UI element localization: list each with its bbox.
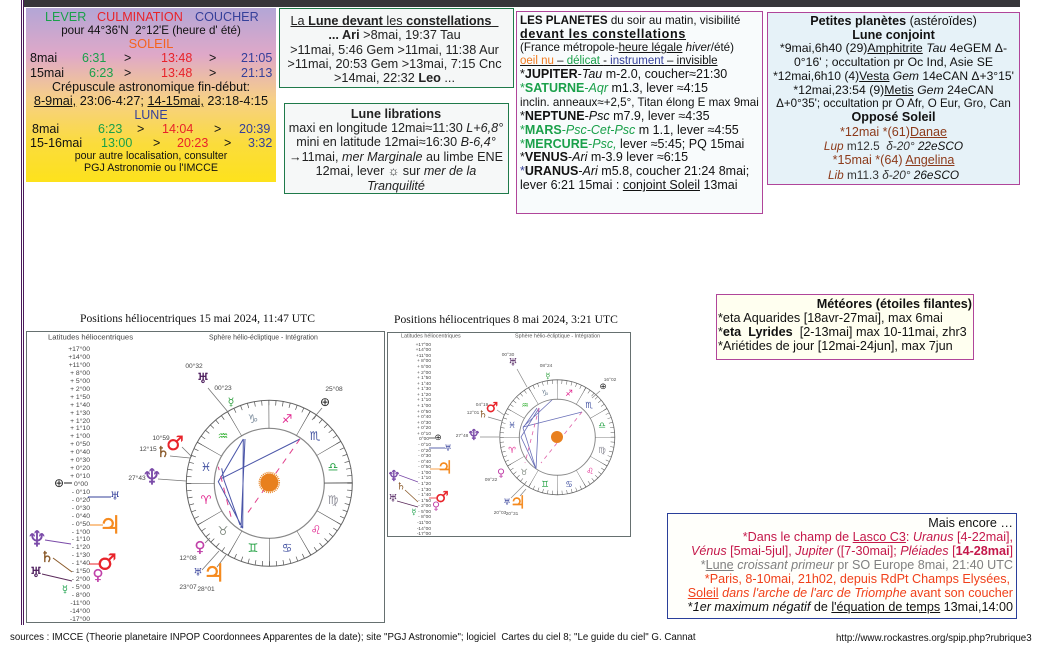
planet degree labels: 12°01 bbox=[467, 410, 480, 416]
heading: Petites planètes (astéroïdes) bbox=[810, 14, 977, 28]
planets around wheel bbox=[142, 371, 330, 588]
planets around wheel: ♃ bbox=[510, 492, 526, 514]
panel: lunar librations: 12mai, lever ☼ sur mer de la bbox=[316, 164, 476, 178]
latitude planets: ♅ bbox=[389, 494, 397, 504]
latitude scale: + 0°40 bbox=[70, 448, 90, 456]
latitude scale: - 1°30 bbox=[418, 487, 431, 493]
Saturn details: inclin. anneaux≈+2,5°, Titan élong E max 9mai bbox=[520, 96, 759, 109]
latitude scale: + 1°20 bbox=[70, 417, 90, 425]
zodiac signs: ♎︎ bbox=[328, 460, 338, 474]
zodiac signs: ♍︎ bbox=[328, 493, 339, 507]
panel: lunar librations: →11mai, mer Marginale au limbe ENE bbox=[289, 150, 503, 164]
latitude scale: + 0°20 bbox=[417, 425, 431, 431]
latitude scale: +11°00 bbox=[416, 353, 431, 359]
latitude scale: - 1°50 bbox=[418, 498, 431, 504]
Amphitrite: *9mai,6h40 (29)Amphitrite Tau 4eGEM Δ- bbox=[780, 41, 1007, 55]
planet degree labels: 00°23 bbox=[214, 384, 232, 392]
latitude scale: +11°00 bbox=[69, 361, 90, 369]
subheading: opposition: Opposé Soleil bbox=[852, 110, 935, 124]
panel: other events: Soleil dans l'arche de l'arc de Triomphe avant son coucher bbox=[688, 586, 1013, 600]
latitude scale: - 0°10 bbox=[418, 442, 431, 448]
eta Lyrides: *eta Lyrides [2-13mai] max 10-11mai, zhr3 bbox=[718, 325, 967, 339]
sun row 15 mai: 15mai bbox=[30, 66, 64, 80]
location line: pour 44°36'N 2°12'E (heure d' été) bbox=[61, 24, 241, 37]
planets around wheel: ♀ bbox=[194, 538, 206, 556]
latitude scale: -14°00 bbox=[70, 607, 90, 615]
latitude scale: + 1°40 bbox=[70, 401, 90, 409]
latitude scale: + 1°50 bbox=[70, 393, 90, 401]
panel: lunar librations: Tranquilité bbox=[367, 179, 425, 193]
latitude scale: - 1°20 bbox=[418, 481, 431, 487]
latitude scale: + 1°00 bbox=[70, 432, 90, 440]
heading: La Lune devant les constellations bbox=[290, 14, 491, 28]
Vesta: *12mai,6h10 (4)Vesta Gem 14eCAN Δ+3°15' bbox=[773, 69, 1014, 83]
latitude scale: - 5°00 bbox=[72, 583, 90, 591]
sun row 15 mai: > bbox=[209, 66, 216, 80]
libration details: maxi en longitude 12mai≈11:30 L+6,8° bbox=[289, 121, 503, 135]
heading: soleil: SOLEIL bbox=[129, 36, 173, 51]
heading: coucher: COUCHER bbox=[195, 10, 259, 24]
latitude planets: ♅ bbox=[444, 444, 452, 452]
zodiac signs: ♓︎ bbox=[508, 420, 516, 430]
planets around wheel: ⊕ bbox=[320, 395, 330, 409]
latitude planets: ⊕ bbox=[434, 433, 442, 443]
heading: culmination: CULMINATION bbox=[97, 10, 183, 24]
planets around wheel bbox=[467, 358, 607, 514]
Mercury: *MERCURE-Psc, lever ≈5:45; PQ 15mai bbox=[520, 137, 744, 151]
latitude planets: ♂ bbox=[435, 488, 449, 506]
latitude scale: + 1°50 bbox=[417, 375, 431, 381]
zodiac signs: ♈︎ bbox=[201, 493, 212, 507]
latitude planets: ⊕ bbox=[54, 476, 64, 490]
latitude planets: ♃ bbox=[99, 510, 121, 540]
twilight times: 8-9mai, 23:06-4:27; 14-15mai, 23:18-4:15 bbox=[34, 94, 268, 108]
latitude scale: -17°00 bbox=[417, 531, 431, 537]
zodiac signs: ♉︎ bbox=[520, 467, 528, 477]
sun row 8 mai: 8mai bbox=[30, 51, 57, 65]
moon row 15-16 mai: > bbox=[153, 136, 160, 150]
latitude scale bbox=[416, 342, 431, 537]
panel: moon in front of constellations: >11mai, 20:53 Gem >13mai, 7:15 Cnc bbox=[287, 57, 502, 71]
latitude scale: +14°00 bbox=[416, 347, 431, 353]
constellation passages: ... Ari >8mai, 19:37 Tau bbox=[328, 28, 461, 42]
latitude scale: -11°00 bbox=[417, 520, 431, 526]
moon row 15-16 mai: 3:32 bbox=[248, 136, 272, 150]
panel: lunar librations bbox=[284, 103, 509, 194]
moon row 8 mai: > bbox=[214, 122, 221, 136]
planets around wheel: ♄ bbox=[156, 443, 170, 461]
sun row 8 mai: > bbox=[124, 51, 131, 65]
sun row 15 mai: 6:23 bbox=[89, 66, 113, 80]
panel: minor planets: Lib m11.3 δ-20° 26eSCO bbox=[828, 168, 959, 182]
planet degree labels: 10°59 bbox=[152, 434, 170, 442]
heading: LES PLANETES du soir au matin, visibilité bbox=[520, 14, 740, 27]
latitude planets: ♄ bbox=[40, 548, 54, 566]
Paris arch alignment: *Paris, 8-10mai, 21h02, depuis RdPt Champs Elysées, bbox=[705, 572, 1010, 586]
zodiac wheel bbox=[500, 380, 615, 495]
chart: heliocentric positions 8 mai bbox=[387, 332, 631, 537]
heading: Météores (étoiles filantes) bbox=[817, 296, 972, 310]
Jupiter: *JUPITER-Tau m-2.0, coucher≈21:30 bbox=[520, 67, 727, 81]
latitude scale: - 1°30 bbox=[72, 551, 90, 559]
moon row 8 mai: 14:04 bbox=[162, 122, 193, 136]
planet degree labels: 08°24 bbox=[540, 363, 553, 369]
chart title: 15 mai: Positions héliocentriques 15 mai 2024, 11:47 UTC bbox=[80, 312, 315, 325]
latitude planets bbox=[27, 476, 121, 596]
visibility legend: oeil nu – délicat - instrument – invisible bbox=[520, 54, 718, 66]
latitude scale: -17°00 bbox=[70, 615, 90, 623]
top dark bar bbox=[24, 0, 1020, 7]
planet degree labels: 27°43 bbox=[128, 474, 146, 482]
chart: heliocentric positions 15 mai bbox=[26, 331, 385, 623]
latitude scale: + 1°10 bbox=[417, 397, 431, 403]
moon row 8 mai bbox=[32, 122, 270, 136]
latitude scale: - 1°40 bbox=[418, 492, 431, 498]
latitude scale: - 0°50 bbox=[72, 520, 90, 528]
latitude scale: + 0°10 bbox=[417, 431, 431, 437]
latitude scale: + 1°30 bbox=[417, 386, 431, 392]
sun row 8 mai: 21:05 bbox=[241, 51, 272, 65]
latitude scale: - 2°00 bbox=[418, 503, 431, 509]
sun row 15 mai: 13:48 bbox=[161, 66, 192, 80]
latitude scale: + 1°30 bbox=[70, 409, 90, 417]
latitude planets: ♅ bbox=[110, 490, 120, 502]
latitude scale: - 0°40 bbox=[418, 459, 431, 465]
planets around wheel: ♂ bbox=[486, 400, 498, 416]
panel: moon in front of constellations bbox=[279, 8, 514, 88]
zodiac signs: ♒︎ bbox=[218, 429, 228, 443]
zodiac signs: ♊︎ bbox=[248, 541, 258, 555]
latitude scale: + 0°20 bbox=[70, 464, 90, 472]
note on other locations: pour autre localisation, consulter bbox=[75, 150, 227, 162]
latitude scale: - 0°20 bbox=[72, 496, 90, 504]
latitude scale: - 1°10 bbox=[418, 475, 431, 481]
planet degree labels bbox=[128, 362, 343, 593]
panel: planets bbox=[516, 11, 763, 214]
moon row 15-16 mai bbox=[30, 136, 272, 150]
planet degree labels: 16°02 bbox=[604, 377, 617, 383]
panel: other events bbox=[667, 513, 1017, 619]
panel: minor planets: Δ+0°35'; occultation pr O Afr, O Eur, Gro, Can bbox=[776, 97, 1011, 110]
zodiac signs: ♓︎ bbox=[201, 460, 211, 474]
latitude scale: +14°00 bbox=[68, 353, 90, 361]
latitude scale: + 1°10 bbox=[70, 424, 90, 432]
latitude scale: + 0°50 bbox=[70, 440, 90, 448]
zodiac signs bbox=[201, 412, 339, 555]
panel: minor planets bbox=[767, 12, 1020, 185]
planets around wheel: ♃ bbox=[203, 558, 225, 588]
planets around wheel: ♆ bbox=[467, 426, 481, 444]
panel: rise, culmination, set times bbox=[26, 8, 276, 182]
planets around wheel: ☿ bbox=[228, 396, 234, 408]
latitude scale: - 1°00 bbox=[72, 528, 90, 536]
latitude scale: 0°00 bbox=[419, 436, 429, 442]
latitude scale: + 1°20 bbox=[417, 392, 431, 398]
planets around wheel: ♅ bbox=[197, 371, 209, 387]
Mars: *MARS-Psc-Cet-Psc m 1.1, lever ≈4:55 bbox=[520, 123, 739, 137]
latitude planets: ☿ bbox=[62, 584, 68, 596]
planets around wheel: ♄ bbox=[479, 410, 487, 420]
latitude planets: ♆ bbox=[27, 528, 47, 552]
eta Aquarides: *eta Aquarides [18avr-27mai], max 6mai bbox=[718, 311, 943, 325]
latitude planets: ♀ bbox=[432, 500, 440, 512]
planet degree labels: 23°07 bbox=[179, 583, 197, 591]
Danae: *12mai *(61)Danae bbox=[840, 125, 947, 139]
scope note: (France métropole-heure légale hiver/été) bbox=[520, 41, 734, 54]
panel: moon in front of constellations: >14mai, 22:32 Leo ... bbox=[334, 71, 455, 85]
subheading: moon conjunctions: Lune conjoint bbox=[852, 28, 935, 42]
zodiac signs bbox=[508, 388, 606, 489]
planets around wheel: ☿ bbox=[546, 372, 550, 380]
sun row 15 mai: > bbox=[124, 66, 131, 80]
Uranus second line: lever 6:21 15mai : conjoint Soleil 13mai bbox=[520, 178, 738, 192]
latitude scale: + 8°00 bbox=[70, 369, 90, 377]
planet degree labels: 09°22 bbox=[485, 477, 498, 483]
latitude scale: - 1°50 bbox=[72, 567, 90, 575]
planet degree labels: 04°19 bbox=[476, 402, 489, 408]
latitude scale: + 2°00 bbox=[417, 370, 431, 376]
zodiac wheel bbox=[186, 400, 352, 566]
footer: url: http://www.rockastres.org/spip.php?rubrique3 bbox=[836, 633, 1032, 644]
zodiac signs: ♈︎ bbox=[508, 445, 516, 455]
zodiac signs: ♌︎ bbox=[586, 466, 594, 476]
footer: sources: sources : IMCCE (Theorie planetaire INPOP Coordonnees Apparentes de la date); site "PGJ Astronomie"; logiciel Cartes du ciel 8; "Le guide du ciel" G. Cannat bbox=[10, 632, 696, 643]
latitude planets: ♅ bbox=[30, 565, 42, 581]
latitude scale: -11°00 bbox=[70, 599, 90, 607]
latitude scale: 0°00 bbox=[74, 480, 88, 488]
sun row 8 mai: > bbox=[209, 51, 216, 65]
latitude scale: +17°00 bbox=[416, 342, 431, 348]
planet degree labels: 12°15 bbox=[139, 445, 157, 453]
heading: Mais encore … bbox=[928, 516, 1013, 530]
note source: PGJ Astronomie ou l'IMCCE bbox=[84, 162, 218, 174]
planets around wheel: ♀ bbox=[497, 466, 505, 480]
latitude planets: ♂ bbox=[97, 550, 117, 576]
latitude planets: ♀ bbox=[92, 566, 104, 584]
zodiac signs: ♐︎ bbox=[282, 412, 292, 426]
planet degree labels: 12°08 bbox=[179, 554, 197, 562]
zodiac signs: ♐︎ bbox=[565, 388, 573, 398]
panel: minor planets: 0°16' ; occultation pr Oc Ind, Asie SE bbox=[794, 55, 993, 69]
young crescent moon: *Lune croissant primeur pr SO Europe 8mai, 21:40 UTC bbox=[701, 558, 1013, 572]
zodiac signs: ♍︎ bbox=[598, 445, 606, 455]
zodiac signs: ♑︎ bbox=[541, 388, 549, 398]
zodiac signs: ♒︎ bbox=[521, 400, 529, 410]
latitude scale: + 5°00 bbox=[417, 364, 431, 370]
moon row 15-16 mai: > bbox=[224, 136, 231, 150]
heading: lever culmination coucher: LEVER bbox=[45, 10, 86, 24]
Saturn: *SATURNE-Aqr m1.3, lever ≈4:15 bbox=[520, 81, 708, 95]
zodiac signs: ♉︎ bbox=[218, 524, 228, 538]
planets around wheel: ♂ bbox=[166, 431, 184, 455]
chart: heliocentric positions 8 mai: Sphère hélio-écliptique - Intégration bbox=[515, 334, 600, 340]
chart: heliocentric positions 15 mai: Sphère hélio-écliptique - Intégration bbox=[209, 334, 318, 342]
zodiac signs: ♌︎ bbox=[311, 523, 321, 537]
latitude scale: + 8°00 bbox=[417, 358, 431, 364]
orbit lines bbox=[521, 400, 582, 469]
latitude scale: - 0°40 bbox=[72, 512, 90, 520]
latitude planets: ☿ bbox=[412, 508, 416, 516]
orbit lines bbox=[218, 439, 300, 528]
chart: heliocentric positions 15 mai: Latitudes héliocentriques bbox=[48, 332, 133, 342]
latitude planets bbox=[387, 433, 453, 516]
latitude scale: - 1°20 bbox=[72, 543, 90, 551]
Arietides: *Ariétides de jour [12mai-24jun], max 7jun bbox=[718, 339, 953, 353]
sun row 8 mai bbox=[30, 51, 272, 65]
twilight text: Crépuscule astronomique fin-début: bbox=[52, 80, 250, 94]
sun bbox=[551, 431, 563, 443]
zodiac signs: ♋︎ bbox=[565, 479, 573, 489]
moon row 8 mai: 20:39 bbox=[239, 122, 270, 136]
latitude scale: -14°00 bbox=[417, 526, 431, 532]
planets around wheel: ⊕ bbox=[599, 382, 607, 392]
planet degree labels bbox=[456, 352, 617, 517]
latitude scale: - 0°10 bbox=[72, 488, 90, 496]
sun row 15 mai bbox=[30, 66, 272, 80]
Lasco C3: *Dans le champ de Lasco C3: Uranus [4-22mai], bbox=[743, 530, 1013, 544]
moon row 15-16 mai: 20:23 bbox=[177, 136, 208, 150]
latitude scale: + 0°40 bbox=[417, 414, 431, 420]
latitude scale: - 0°30 bbox=[418, 453, 431, 459]
latitude scale: - 0°20 bbox=[418, 448, 431, 454]
chart title: 8 mai: Positions héliocentriques 8 mai 2024, 3:21 UTC bbox=[394, 313, 618, 326]
heading second line: devant les constellations bbox=[520, 27, 686, 41]
latitude scale: + 0°30 bbox=[70, 456, 90, 464]
moon row 8 mai: > bbox=[137, 122, 144, 136]
latitude scale: - 1°40 bbox=[72, 559, 90, 567]
heading: Lune librations bbox=[351, 106, 441, 120]
latitude scale: + 1°40 bbox=[417, 381, 431, 387]
latitude scale: +17°00 bbox=[68, 345, 90, 353]
moon row 15-16 mai: 13:00 bbox=[101, 136, 132, 150]
moon row 8 mai: 6:23 bbox=[98, 122, 122, 136]
latitude scale: - 1°00 bbox=[418, 470, 431, 476]
planet degree labels: 20°31 bbox=[506, 511, 519, 517]
latitude scale: + 1°00 bbox=[417, 403, 431, 409]
chart: heliocentric positions 8 mai: Latitudes héliocentriques bbox=[401, 334, 461, 340]
panel: moon in front of constellations: >11mai, 5:46 Gem >11mai, 11:38 Aur bbox=[290, 43, 499, 57]
latitude scale: + 0°50 bbox=[417, 409, 431, 415]
planet degree labels: 20°03 bbox=[494, 510, 507, 516]
heading: lune: LUNE bbox=[134, 108, 168, 122]
zodiac signs: ♑︎ bbox=[248, 412, 258, 426]
latitude scale: - 8°00 bbox=[72, 591, 90, 599]
sun row 8 mai: 6:31 bbox=[82, 51, 106, 65]
latitude scale: - 2°00 bbox=[72, 575, 90, 583]
zodiac signs: ♊︎ bbox=[541, 479, 549, 489]
Neptune: *NEPTUNE-Psc m7.9, lever ≈4:35 bbox=[520, 109, 710, 123]
planets around wheel: ♅ bbox=[509, 358, 517, 368]
zodiac signs: ♎︎ bbox=[598, 420, 606, 430]
planets around wheel: ♆ bbox=[142, 466, 162, 490]
latitude scale: - 1°10 bbox=[72, 535, 90, 543]
latitude scale: + 0°10 bbox=[70, 472, 90, 480]
panel: meteors bbox=[716, 294, 974, 360]
moon row 8 mai: 8mai bbox=[32, 122, 59, 136]
planet degree labels: 27°48 bbox=[456, 433, 469, 439]
planet degree labels: 25°08 bbox=[325, 385, 343, 393]
Angelina: *15mai *(64) Angelina bbox=[833, 153, 954, 167]
latitude planets: ♃ bbox=[437, 458, 453, 478]
latitude scale: - 8°00 bbox=[418, 514, 431, 520]
sun row 15 mai: 21:13 bbox=[241, 66, 272, 80]
latitude scale: + 5°00 bbox=[70, 377, 90, 385]
Venus: *VENUS-Ari m-3.9 lever ≈6:15 bbox=[520, 150, 688, 164]
latitude planets: ♄ bbox=[397, 482, 405, 492]
latitude scale: - 0°30 bbox=[72, 504, 90, 512]
Uranus: *URANUS-Ari m5.8, coucher 21:24 8mai; bbox=[520, 164, 749, 178]
latitude planets: ♆ bbox=[387, 467, 401, 485]
latitude scale: - 0°50 bbox=[418, 464, 431, 470]
latitude scale bbox=[68, 345, 90, 623]
left vertical double rule bbox=[21, 0, 24, 625]
moon row 15-16 mai: 15-16mai bbox=[30, 136, 82, 150]
zodiac signs: ♋︎ bbox=[282, 541, 292, 555]
latitude scale: - 5°00 bbox=[418, 509, 431, 515]
sun row 8 mai: 13:48 bbox=[161, 51, 192, 65]
planets around wheel: ♅ bbox=[194, 568, 202, 578]
planet degree labels: 28°01 bbox=[197, 585, 215, 593]
panel: minor planets: Lup m12.5 δ-20° 22eSCO bbox=[824, 139, 963, 153]
sun bbox=[259, 472, 279, 492]
panel: lunar librations: mini en latitude 12mai≈16:30 B-6,4° bbox=[296, 135, 496, 149]
equation of time: *1er maximum négatif de l'équation de temps 13mai,14:00 bbox=[688, 600, 1013, 614]
panel: other events: Vénus [5mai-5jul], Jupiter ([7-30mai]; Pléiades [14-28mai] bbox=[691, 544, 1013, 558]
latitude scale: + 0°30 bbox=[417, 420, 431, 426]
planet degree labels: 00°30 bbox=[502, 352, 515, 358]
Metis: *12mai,23:54 (9)Metis Gem 24eCAN bbox=[793, 83, 994, 97]
zodiac signs: ♏︎ bbox=[585, 400, 593, 410]
planets around wheel: ♅ bbox=[503, 498, 511, 506]
planet degree labels: 00°32 bbox=[185, 362, 203, 370]
zodiac signs: ♏︎ bbox=[310, 429, 321, 443]
latitude scale: + 2°00 bbox=[70, 385, 90, 393]
